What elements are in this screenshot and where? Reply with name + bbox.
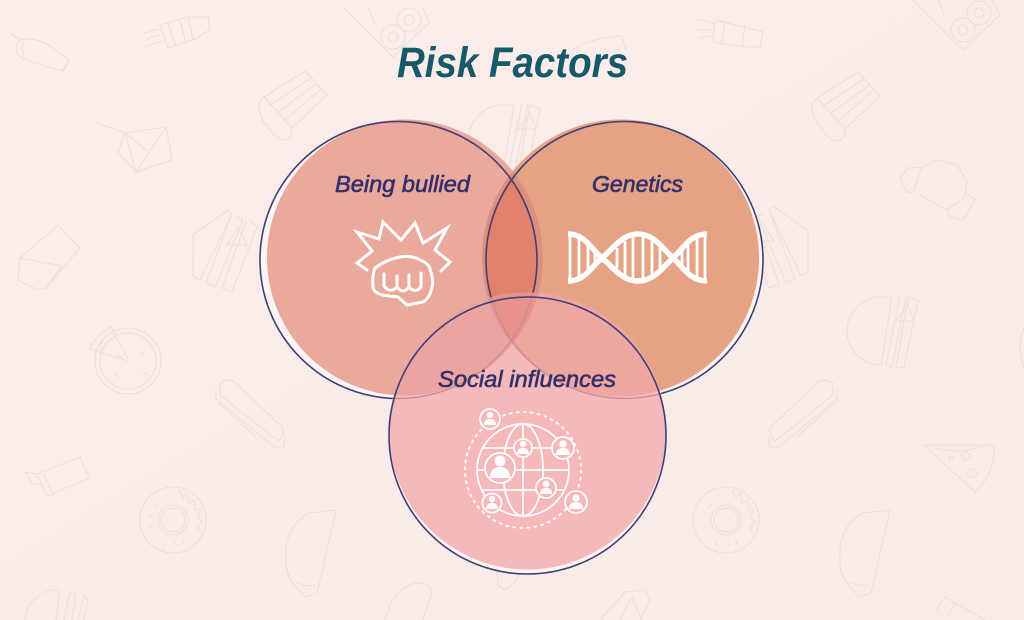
icon: burger right	[847, 295, 918, 368]
icon: fist punch	[357, 222, 450, 305]
icon: drink cup	[25, 457, 89, 496]
panel: genetics circle	[482, 120, 759, 396]
icon: soda cup right	[697, 20, 763, 47]
icon: bottom right pill	[935, 597, 985, 620]
icon: burger centre	[469, 103, 540, 176]
icon: bottom sandwich	[600, 590, 650, 620]
panel: social influences circle	[389, 292, 666, 570]
title: Risk Factors	[397, 39, 628, 87]
icon: hot dog	[216, 380, 284, 447]
light halos inside outlines	[260, 122, 762, 574]
icon: bottom wrap	[385, 583, 431, 620]
outline: social influences	[389, 297, 666, 574]
icon: donut	[140, 487, 206, 553]
icon: wrap	[18, 225, 80, 290]
icon: soda cup	[145, 17, 210, 48]
icon: popcorn right	[812, 72, 880, 141]
icon: arc behind title	[572, 36, 626, 50]
icon: popcorn	[259, 71, 327, 140]
outline: genetics	[486, 122, 763, 398]
outline: being bullied	[260, 122, 537, 398]
icon: hot dog right	[769, 380, 837, 447]
icon: taco	[286, 510, 336, 597]
label: being bullied: Being bullied	[335, 171, 471, 197]
icon: sandwich right	[744, 206, 808, 288]
icon: takeaway box	[97, 123, 172, 172]
icon: donut right	[693, 487, 759, 553]
people glyphs	[484, 412, 583, 509]
overlaps inside social circle	[392, 292, 661, 400]
people nodes	[480, 409, 587, 513]
overlap: bullied and genetics	[482, 172, 543, 298]
icon: sandwich	[193, 210, 257, 292]
icon: sushi box top	[343, 7, 430, 57]
icon: pizza slice	[924, 445, 994, 492]
icon: taco tail under circle	[497, 570, 522, 590]
label: genetics: Genetics	[592, 171, 684, 197]
icon: pizza	[90, 327, 161, 394]
venn diagram	[260, 120, 763, 574]
icon: piping bag	[10, 33, 69, 73]
icon: taco right	[840, 510, 890, 597]
dashed orbit	[465, 412, 581, 528]
icon: social globe network	[465, 409, 587, 528]
panel: being bullied circle	[267, 120, 543, 396]
icon: dna helix	[568, 234, 707, 281]
icon: right edge arc	[1020, 328, 1024, 368]
label: social influences: Social influences	[438, 366, 617, 392]
icon: burger bottom left	[25, 590, 88, 620]
icon: sushi box right	[913, 0, 1000, 50]
icon: boxing glove	[900, 160, 975, 220]
globe	[477, 424, 569, 516]
